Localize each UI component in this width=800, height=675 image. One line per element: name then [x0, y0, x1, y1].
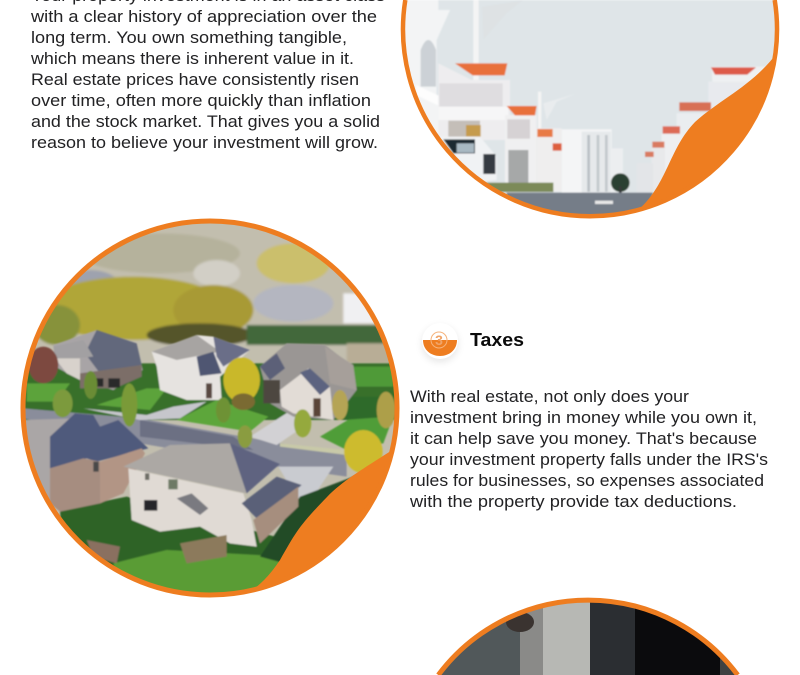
panel: street photo circle	[400, 0, 800, 227]
icon: number 3 badge	[422, 323, 458, 362]
far houses left	[542, 128, 562, 192]
yellow tree	[223, 357, 260, 403]
heading: Taxes: Taxes	[470, 330, 524, 350]
hedge and road	[487, 183, 553, 192]
lamp post	[473, 0, 479, 80]
text block: taxes paragraph: it can help save you money. That's because	[410, 429, 757, 448]
text block: appreciation paragraph: with a clear history of appreciation over the	[30, 7, 377, 26]
text block: taxes paragraph: your investment property falls under the IRS's	[410, 450, 768, 469]
text block: taxes paragraph: with the property provide tax deductions.	[409, 492, 737, 511]
right houses	[712, 66, 765, 82]
text block: taxes paragraph: rules for businesses, so expenses associated	[410, 471, 764, 490]
second house	[505, 115, 536, 183]
road	[23, 408, 347, 477]
text block: appreciation paragraph	[30, 0, 385, 152]
left tall building	[405, 0, 450, 134]
blurred background	[34, 224, 394, 537]
text block: taxes paragraph	[409, 387, 768, 511]
text block: appreciation paragraph: Real estate prices have consistently risen	[31, 70, 359, 89]
text block: appreciation paragraph: and the stock market. That gives you a solid	[31, 112, 380, 131]
first house	[438, 63, 510, 140]
panel: bottom photo circle	[430, 595, 750, 675]
bottom lawn	[60, 497, 300, 610]
house C	[260, 343, 357, 420]
apartment tower	[562, 129, 612, 194]
tree	[611, 173, 630, 192]
house D foreground	[123, 443, 302, 563]
small trees	[53, 389, 73, 417]
text block: appreciation paragraph: which means there is inherent value in it.	[30, 49, 354, 68]
icon: number 3 badge: 3	[435, 332, 443, 348]
text block: taxes paragraph: investment bring in money while you own it,	[410, 408, 757, 427]
text block: appreciation paragraph: reason to believe your investment will grow.	[31, 133, 378, 152]
house E left	[20, 413, 148, 512]
panel: suburban houses photo circle	[20, 218, 400, 598]
text block: appreciation paragraph: long term. You own something tangible,	[31, 28, 347, 47]
house A	[53, 330, 143, 390]
orange page curl	[257, 452, 390, 586]
lawns	[20, 363, 400, 420]
house B	[152, 335, 250, 400]
car	[440, 137, 497, 182]
second lamp	[538, 92, 542, 128]
text block: appreciation paragraph: over time, often more quickly than inflation	[31, 91, 371, 110]
orange page curl	[642, 58, 772, 207]
red tree left	[28, 347, 58, 383]
text block: taxes paragraph: With real estate, not only does your	[410, 387, 689, 406]
